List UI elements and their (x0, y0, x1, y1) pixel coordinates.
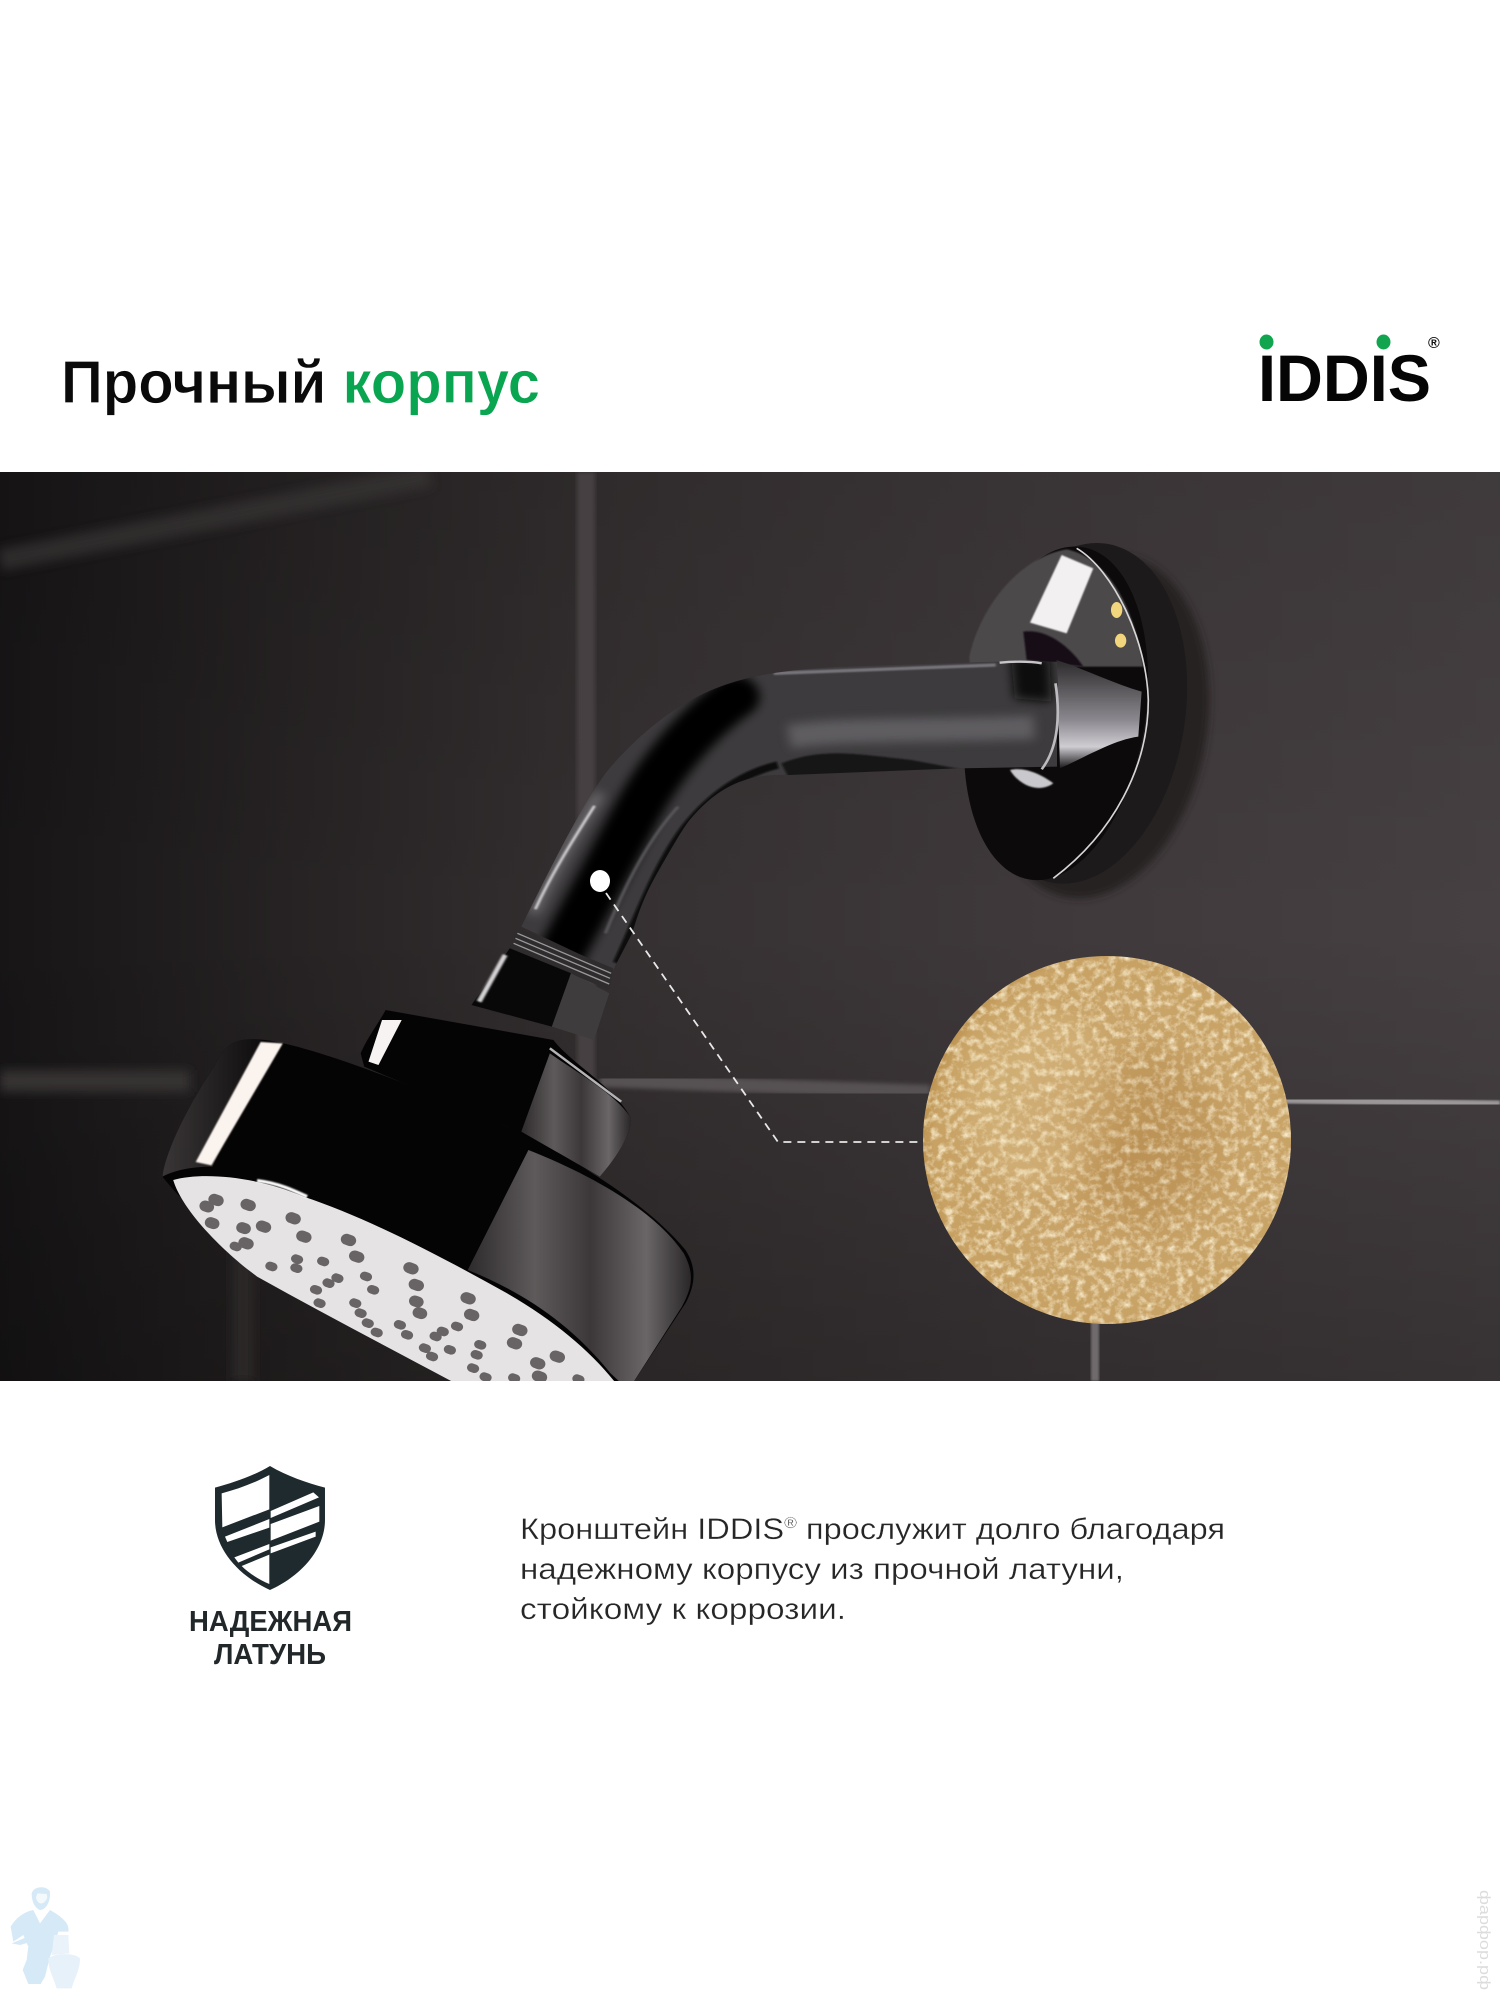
upper tier (361, 1010, 631, 1177)
arm (522, 660, 1060, 970)
callout: brass texture circle (923, 956, 1291, 1324)
description text: надежному корпусу из прочной латуни, (520, 1553, 1124, 1586)
badge: shield icon (215, 1466, 325, 1590)
badge label: ЛАТУНЬ (214, 1639, 326, 1671)
shower head (162, 1010, 694, 1390)
wall flange (964, 543, 1212, 900)
tile joints (0, 472, 1500, 1381)
badge label: НАДЕЖНАЯ (189, 1606, 352, 1638)
nozzles (205, 1199, 559, 1377)
threaded collar and nut (471, 928, 613, 1040)
badge label (189, 1606, 352, 1671)
description text: ® (784, 1515, 797, 1532)
nozzle face (173, 1176, 614, 1390)
description text (520, 1513, 1225, 1626)
callout marker and dashed leader (590, 870, 923, 1142)
logo: IDDIS: IDDIS (1258, 341, 1431, 415)
description text: стойкому к коррозии. (520, 1593, 846, 1626)
photo: shower arm on dark tiled wall (0, 472, 1500, 1390)
watermark: vertical site name: фарфор.рф (1476, 1890, 1493, 1990)
main cylinder (162, 1039, 694, 1390)
description text: прослужит долго благодаря (797, 1513, 1225, 1546)
watermark: plumber with toilet (11, 1887, 80, 1988)
title: Прочный корпус (61, 349, 540, 416)
description text: Кронштейн IDDIS (520, 1513, 763, 1546)
logo: IDDIS: ® (1428, 335, 1440, 352)
wall (0, 472, 1500, 1381)
